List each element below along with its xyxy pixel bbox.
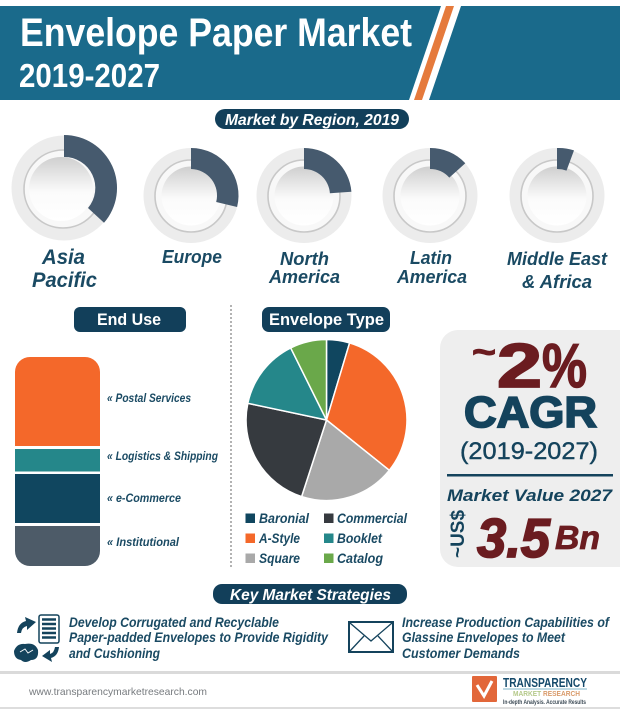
pie legend: A-Style bbox=[258, 530, 300, 546]
period: (2019-2027) bbox=[460, 438, 598, 465]
donut: Latin America bbox=[382, 148, 478, 287]
label: & Africa bbox=[522, 271, 592, 292]
heading: key market strategies: Key Market Strategies bbox=[230, 587, 391, 604]
currency: ~US$ bbox=[448, 510, 469, 558]
unit: Bn bbox=[555, 519, 600, 556]
pie legend: Square bbox=[259, 550, 300, 566]
pie legend: Baronial bbox=[259, 510, 310, 526]
logo: Transparency Market Research: MARKET RESEARCH bbox=[513, 691, 580, 698]
icon: envelope bbox=[349, 622, 393, 652]
label: Middle East bbox=[507, 248, 608, 269]
logo: Transparency Market Research: In-depth Analysis. Accurate Results bbox=[503, 700, 587, 706]
CAGR value: % bbox=[542, 332, 587, 401]
CAGR value: 2 bbox=[497, 332, 542, 401]
CAGR label: CAGR bbox=[464, 388, 597, 437]
strategy text: corrugated envelopes: and Cushioning bbox=[69, 645, 160, 661]
header banner bbox=[0, 6, 620, 100]
bar labels: « Institutional bbox=[107, 537, 180, 549]
donut: Middle East and Africa bbox=[507, 148, 608, 292]
pie legend: Commercial bbox=[337, 510, 408, 526]
bar labels: « Postal Services bbox=[107, 393, 191, 405]
pie legend: Booklet bbox=[337, 530, 383, 546]
title: Envelope Paper Market bbox=[20, 11, 412, 55]
label: America bbox=[396, 266, 467, 287]
icon: recycling document bbox=[14, 615, 59, 662]
donut: Asia Pacific bbox=[12, 135, 117, 292]
CAGR value: ~ bbox=[472, 331, 496, 372]
website url: www.transparencymarketresearch.com bbox=[28, 686, 207, 698]
pie legend: Catalog bbox=[337, 550, 383, 566]
market value: 3.5 bbox=[477, 507, 551, 569]
heading: envelope type: Envelope Type bbox=[269, 310, 384, 329]
heading: end use bbox=[74, 307, 186, 332]
pie chart: envelope type bbox=[246, 340, 407, 501]
strategy text: glassine envelopes: Glassine Envelopes to Meet bbox=[402, 629, 566, 645]
bar labels bbox=[107, 393, 218, 549]
CAGR panel bbox=[440, 330, 620, 569]
logo: Transparency Market Research: TRANSPARENCY bbox=[503, 676, 588, 690]
heading: market by region: Market by Region, 2019 bbox=[225, 112, 399, 129]
pie legend bbox=[246, 510, 408, 566]
donut: North America bbox=[256, 148, 352, 287]
subtitle years: 2019-2027 bbox=[19, 57, 160, 94]
label: Europe bbox=[162, 246, 222, 267]
strategy text: glassine envelopes: Customer Demands bbox=[402, 645, 520, 661]
bar labels: « Logistics & Shipping bbox=[107, 451, 218, 463]
label: America bbox=[268, 266, 340, 287]
strategy text: corrugated envelopes: Paper-padded Envelopes to Provide Rigidity bbox=[69, 629, 329, 645]
label: Asia bbox=[41, 246, 85, 269]
heading: end use: End Use bbox=[97, 310, 161, 329]
label: North bbox=[280, 248, 329, 269]
logo: Transparency Market Research bbox=[472, 676, 588, 706]
stacked bar: end use bbox=[15, 357, 100, 566]
strategy text: corrugated envelopes: Develop Corrugated and Recyclable bbox=[69, 614, 279, 630]
market value label: Market Value 2027 bbox=[447, 487, 613, 505]
label: Latin bbox=[410, 247, 452, 268]
label: Pacific bbox=[32, 269, 97, 292]
bar labels: « e-Commerce bbox=[107, 493, 182, 505]
donut: Europe bbox=[144, 148, 239, 267]
